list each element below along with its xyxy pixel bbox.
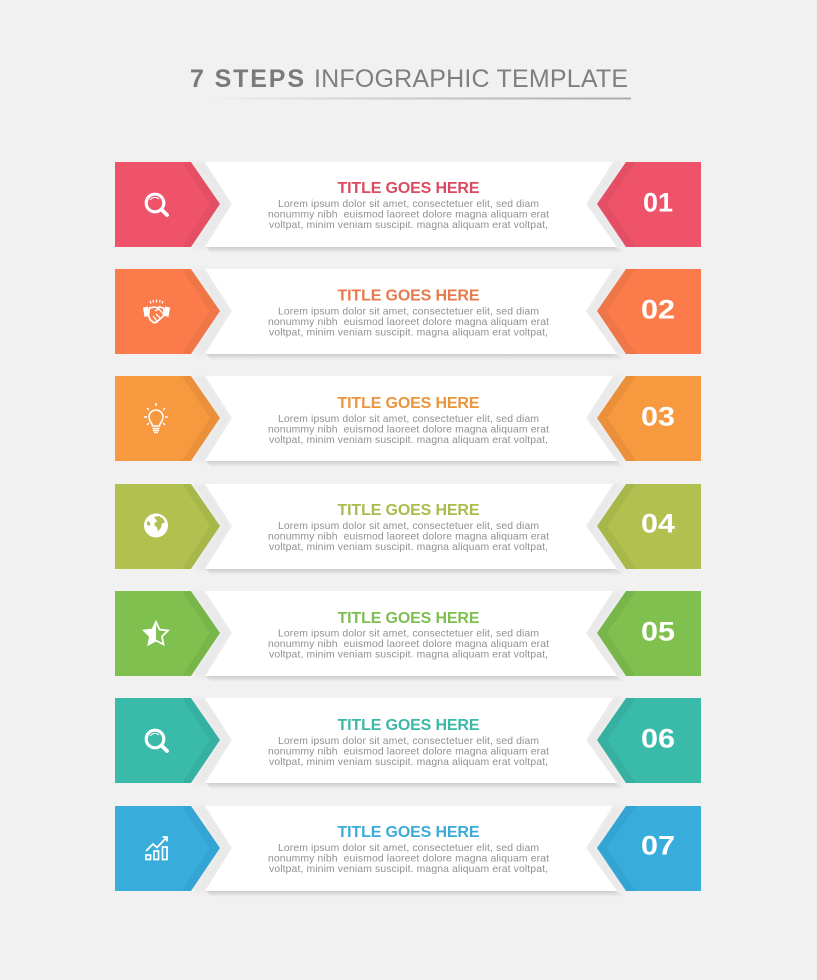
step 4 title: TITLE GOES HERE <box>338 502 480 519</box>
step 2 row <box>115 269 701 360</box>
step 4 row <box>115 484 701 575</box>
step 7 title: TITLE GOES HERE <box>338 824 480 841</box>
step 3 left arrow tile <box>115 376 220 461</box>
step 2 body text: Lorem ipsum dolor sit amet, consectetuer elit, sed diam <box>278 306 539 318</box>
panel: step 4 text card <box>193 484 626 575</box>
step 3 number: 03 <box>641 402 675 432</box>
panel: step 5 text card <box>193 591 626 682</box>
step 5 right arrow tile <box>597 591 701 676</box>
step 2 body text <box>268 306 549 338</box>
step 5 left arrow tile <box>115 591 220 676</box>
step 2 right arrow tile <box>597 269 701 354</box>
step 2 number: 02 <box>641 294 675 324</box>
step 5 body text <box>268 628 549 660</box>
step 5 body text: nonummy nibh euismod laoreet dolore magna aliquam erat <box>268 639 549 650</box>
step 1 number: 01 <box>643 188 673 218</box>
step 1 row <box>115 162 701 253</box>
step 7 row <box>115 806 701 897</box>
panel: step 6 text card <box>193 698 626 789</box>
step 7 number: 07 <box>641 830 675 860</box>
step 3 body text <box>268 414 549 446</box>
icon: magnifier <box>146 194 167 215</box>
step 6 body text <box>268 736 549 768</box>
title: 7 STEPS <box>190 65 304 93</box>
step 6 right arrow tile <box>597 698 701 783</box>
panel: step 3 text card <box>193 376 626 467</box>
step 5 number: 05 <box>641 616 675 646</box>
icon: growth chart <box>146 837 167 860</box>
title underline <box>205 98 631 100</box>
step 7 body text: Lorem ipsum dolor sit amet, consectetuer elit, sed diam <box>278 843 539 854</box>
step 6 body text: voltpat, minim veniam suscipit. magna aliquam erat voltpat, <box>269 757 548 768</box>
step 6 title: TITLE GOES HERE <box>338 717 480 734</box>
step 5 body text: voltpat, minim veniam suscipit. magna aliquam erat voltpat, <box>269 650 548 660</box>
step 2 left arrow tile <box>115 269 220 354</box>
step 1 body text: Lorem ipsum dolor sit amet, consectetuer elit, sed diam <box>278 199 539 210</box>
step 3 body text: nonummy nibh euismod laoreet dolore magna aliquam erat <box>268 424 549 436</box>
step 2 body text: nonummy nibh euismod laoreet dolore magna aliquam erat <box>268 317 549 328</box>
panel: step 1 text card <box>193 162 626 253</box>
icon: light bulb <box>144 403 168 432</box>
step 7 body text <box>268 843 549 875</box>
step 3 title: TITLE GOES HERE <box>338 395 480 412</box>
icon: star <box>144 622 168 644</box>
step 3 body text: Lorem ipsum dolor sit amet, consectetuer elit, sed diam <box>278 414 539 425</box>
step 7 body text: nonummy nibh euismod laoreet dolore magna aliquam erat <box>268 854 549 864</box>
step 4 left arrow tile <box>115 484 220 569</box>
icon: globe <box>144 514 168 538</box>
step 6 body text: Lorem ipsum dolor sit amet, consectetuer elit, sed diam <box>278 736 539 747</box>
title: INFOGRAPHIC TEMPLATE <box>314 65 628 93</box>
step 4 number: 04 <box>641 508 675 538</box>
step 3 body text: voltpat, minim veniam suscipit. magna aliquam erat voltpat, <box>269 435 548 446</box>
step 7 left arrow tile <box>115 806 220 891</box>
step 1 left arrow tile <box>115 162 220 247</box>
icon: magnifier <box>146 730 167 751</box>
step 6 number: 06 <box>641 724 675 754</box>
step 1 right arrow tile <box>597 162 701 247</box>
step 1 body text: voltpat, minim veniam suscipit. magna aliquam erat voltpat, <box>269 220 548 231</box>
step 2 body text: voltpat, minim veniam suscipit. magna aliquam erat voltpat, <box>269 328 548 338</box>
step 7 body text: voltpat, minim veniam suscipit. magna aliquam erat voltpat, <box>269 864 548 875</box>
step 5 row <box>115 591 701 682</box>
step 3 right arrow tile <box>597 376 701 461</box>
step 5 title: TITLE GOES HERE <box>338 610 480 627</box>
step 4 body text: Lorem ipsum dolor sit amet, consectetuer elit, sed diam <box>278 521 539 532</box>
step 1 title: TITLE GOES HERE <box>338 180 480 197</box>
step 6 body text: nonummy nibh euismod laoreet dolore magna aliquam erat <box>268 746 549 758</box>
step 4 body text: voltpat, minim veniam suscipit. magna aliquam erat voltpat, <box>269 542 548 553</box>
panel: step 2 text card <box>193 269 626 360</box>
step 6 left arrow tile <box>115 698 220 783</box>
icon: handshake <box>143 300 170 322</box>
step 5 body text: Lorem ipsum dolor sit amet, consectetuer elit, sed diam <box>278 628 539 640</box>
step 6 row <box>115 698 701 789</box>
step 2 title: TITLE GOES HERE <box>338 288 480 304</box>
step 1 body text: nonummy nibh euismod laoreet dolore magna aliquam erat <box>268 210 549 220</box>
step 4 body text <box>268 521 549 553</box>
step 3 row <box>115 376 701 467</box>
step 7 right arrow tile <box>597 806 701 891</box>
step 4 right arrow tile <box>597 484 701 569</box>
step 4 body text: nonummy nibh euismod laoreet dolore magna aliquam erat <box>268 532 549 542</box>
panel: step 7 text card <box>193 806 626 897</box>
step 1 body text <box>268 199 549 231</box>
